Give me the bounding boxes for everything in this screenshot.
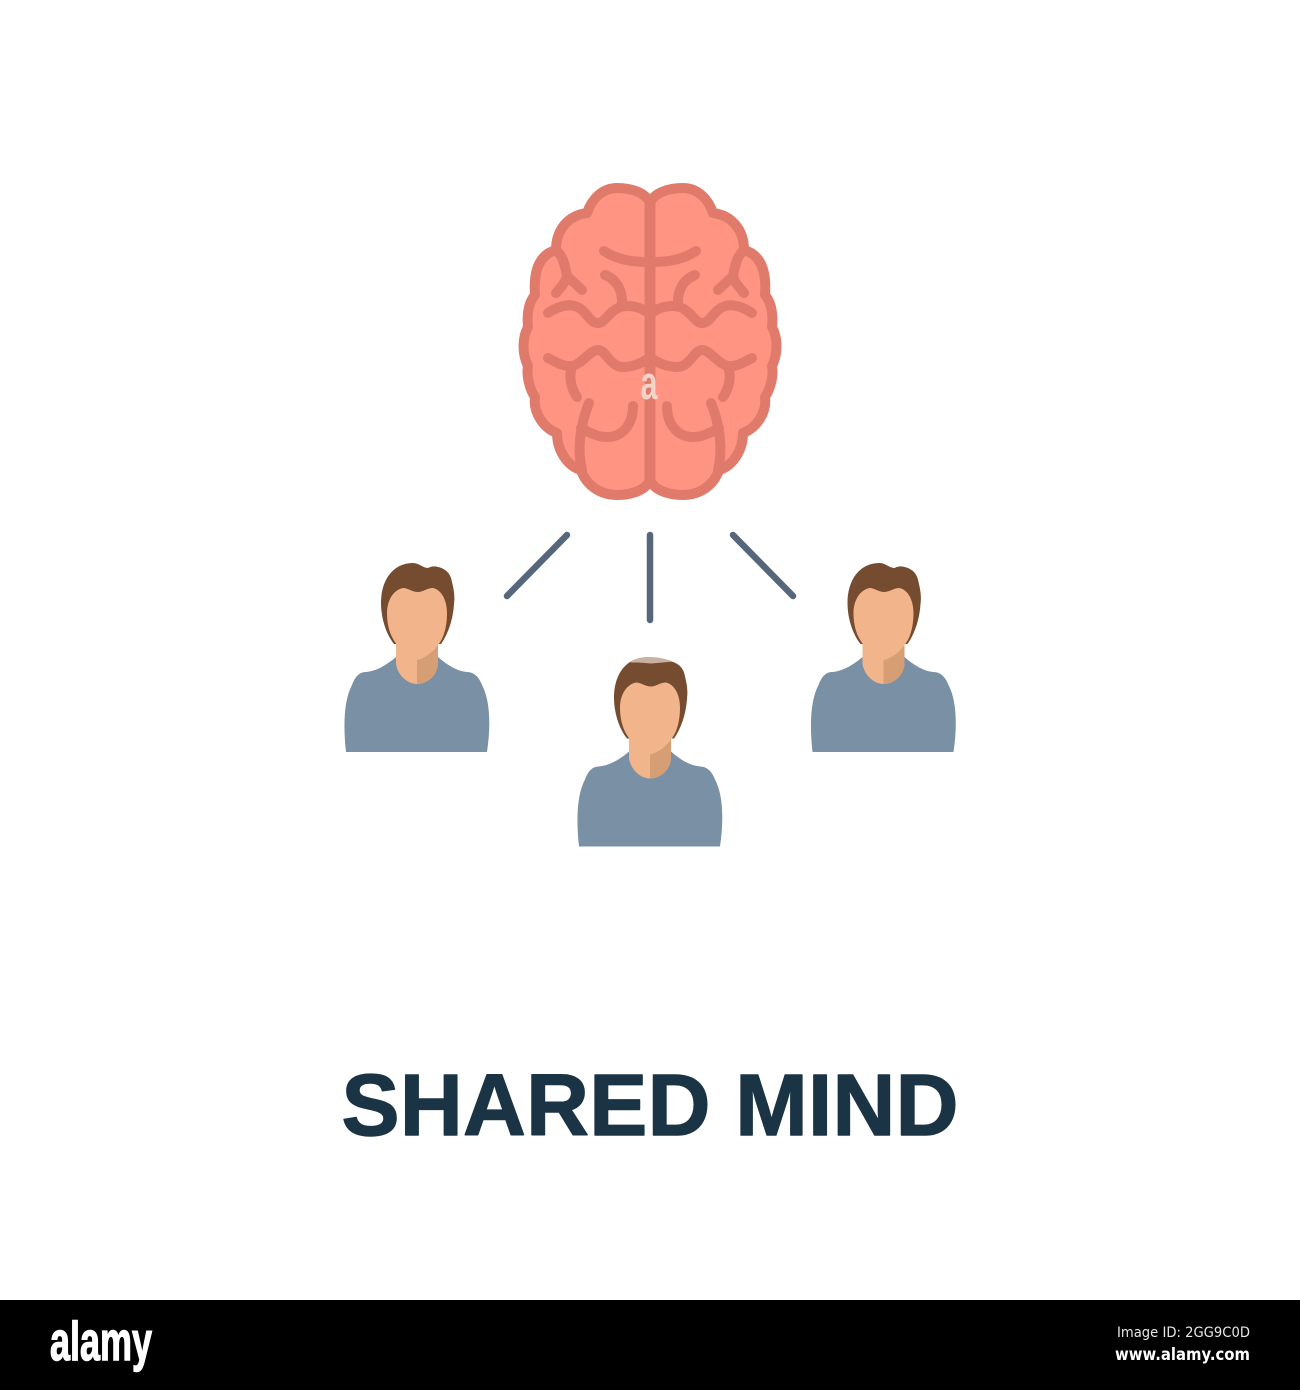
footer bar (0, 1300, 1300, 1390)
title: SHARED MIND (342, 1057, 958, 1154)
brain watermark letter: a (640, 356, 658, 409)
brain left hemisphere (524, 188, 650, 495)
icon: brain (524, 188, 776, 495)
footer image id: Image ID: 2GG9C0D (1117, 1325, 1250, 1341)
person: left (344, 563, 489, 752)
person: right (811, 563, 956, 752)
brain centre divide (644, 203, 656, 480)
person: centre (577, 657, 722, 846)
footer logo: alamy (50, 1310, 152, 1372)
connector lines (507, 535, 793, 620)
brain right hemisphere (650, 188, 776, 495)
footer url: www.alamy.com (1115, 1345, 1250, 1365)
